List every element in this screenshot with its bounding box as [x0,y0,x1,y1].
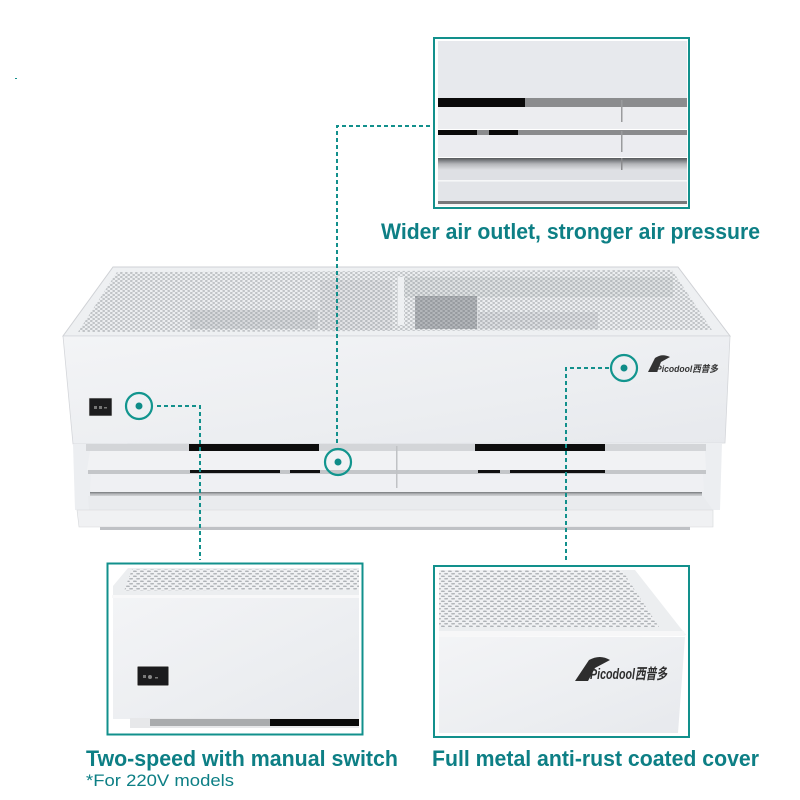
heading: cover: Full metal anti-rust coated cover [432,746,759,771]
logo close-up: Picodool西普多 [590,666,668,683]
heading: switch: Two-speed with manual switch [86,746,398,771]
panel: cover close-up [434,566,689,737]
hotspot: air outlet [325,449,351,475]
connector: air outlet callout [337,126,430,446]
rocker switch close-up [137,666,169,686]
top face with perforated mesh [63,267,730,336]
logo close-up [575,657,668,683]
air outlet housing [73,443,722,510]
rocker switch [89,398,112,416]
hotspot: cover [611,355,637,381]
heading: air outlet: Wider air outlet, stronger air pressure [381,219,760,244]
stray teal mark [15,78,17,79]
hotspot: switch [126,393,152,419]
panel: air outlet close-up [434,38,689,208]
product: air curtain unit [63,267,730,530]
logo on front panel: Picodool西普多 [656,363,718,375]
front panel [63,336,730,444]
note: voltage: *For 220V models [86,772,234,790]
bottom lip [77,496,713,530]
logo on front panel [648,355,718,375]
louver slats [87,446,706,492]
panel: switch close-up [108,564,362,734]
connector: cover callout [566,368,609,563]
connector: switch callout [157,406,200,560]
